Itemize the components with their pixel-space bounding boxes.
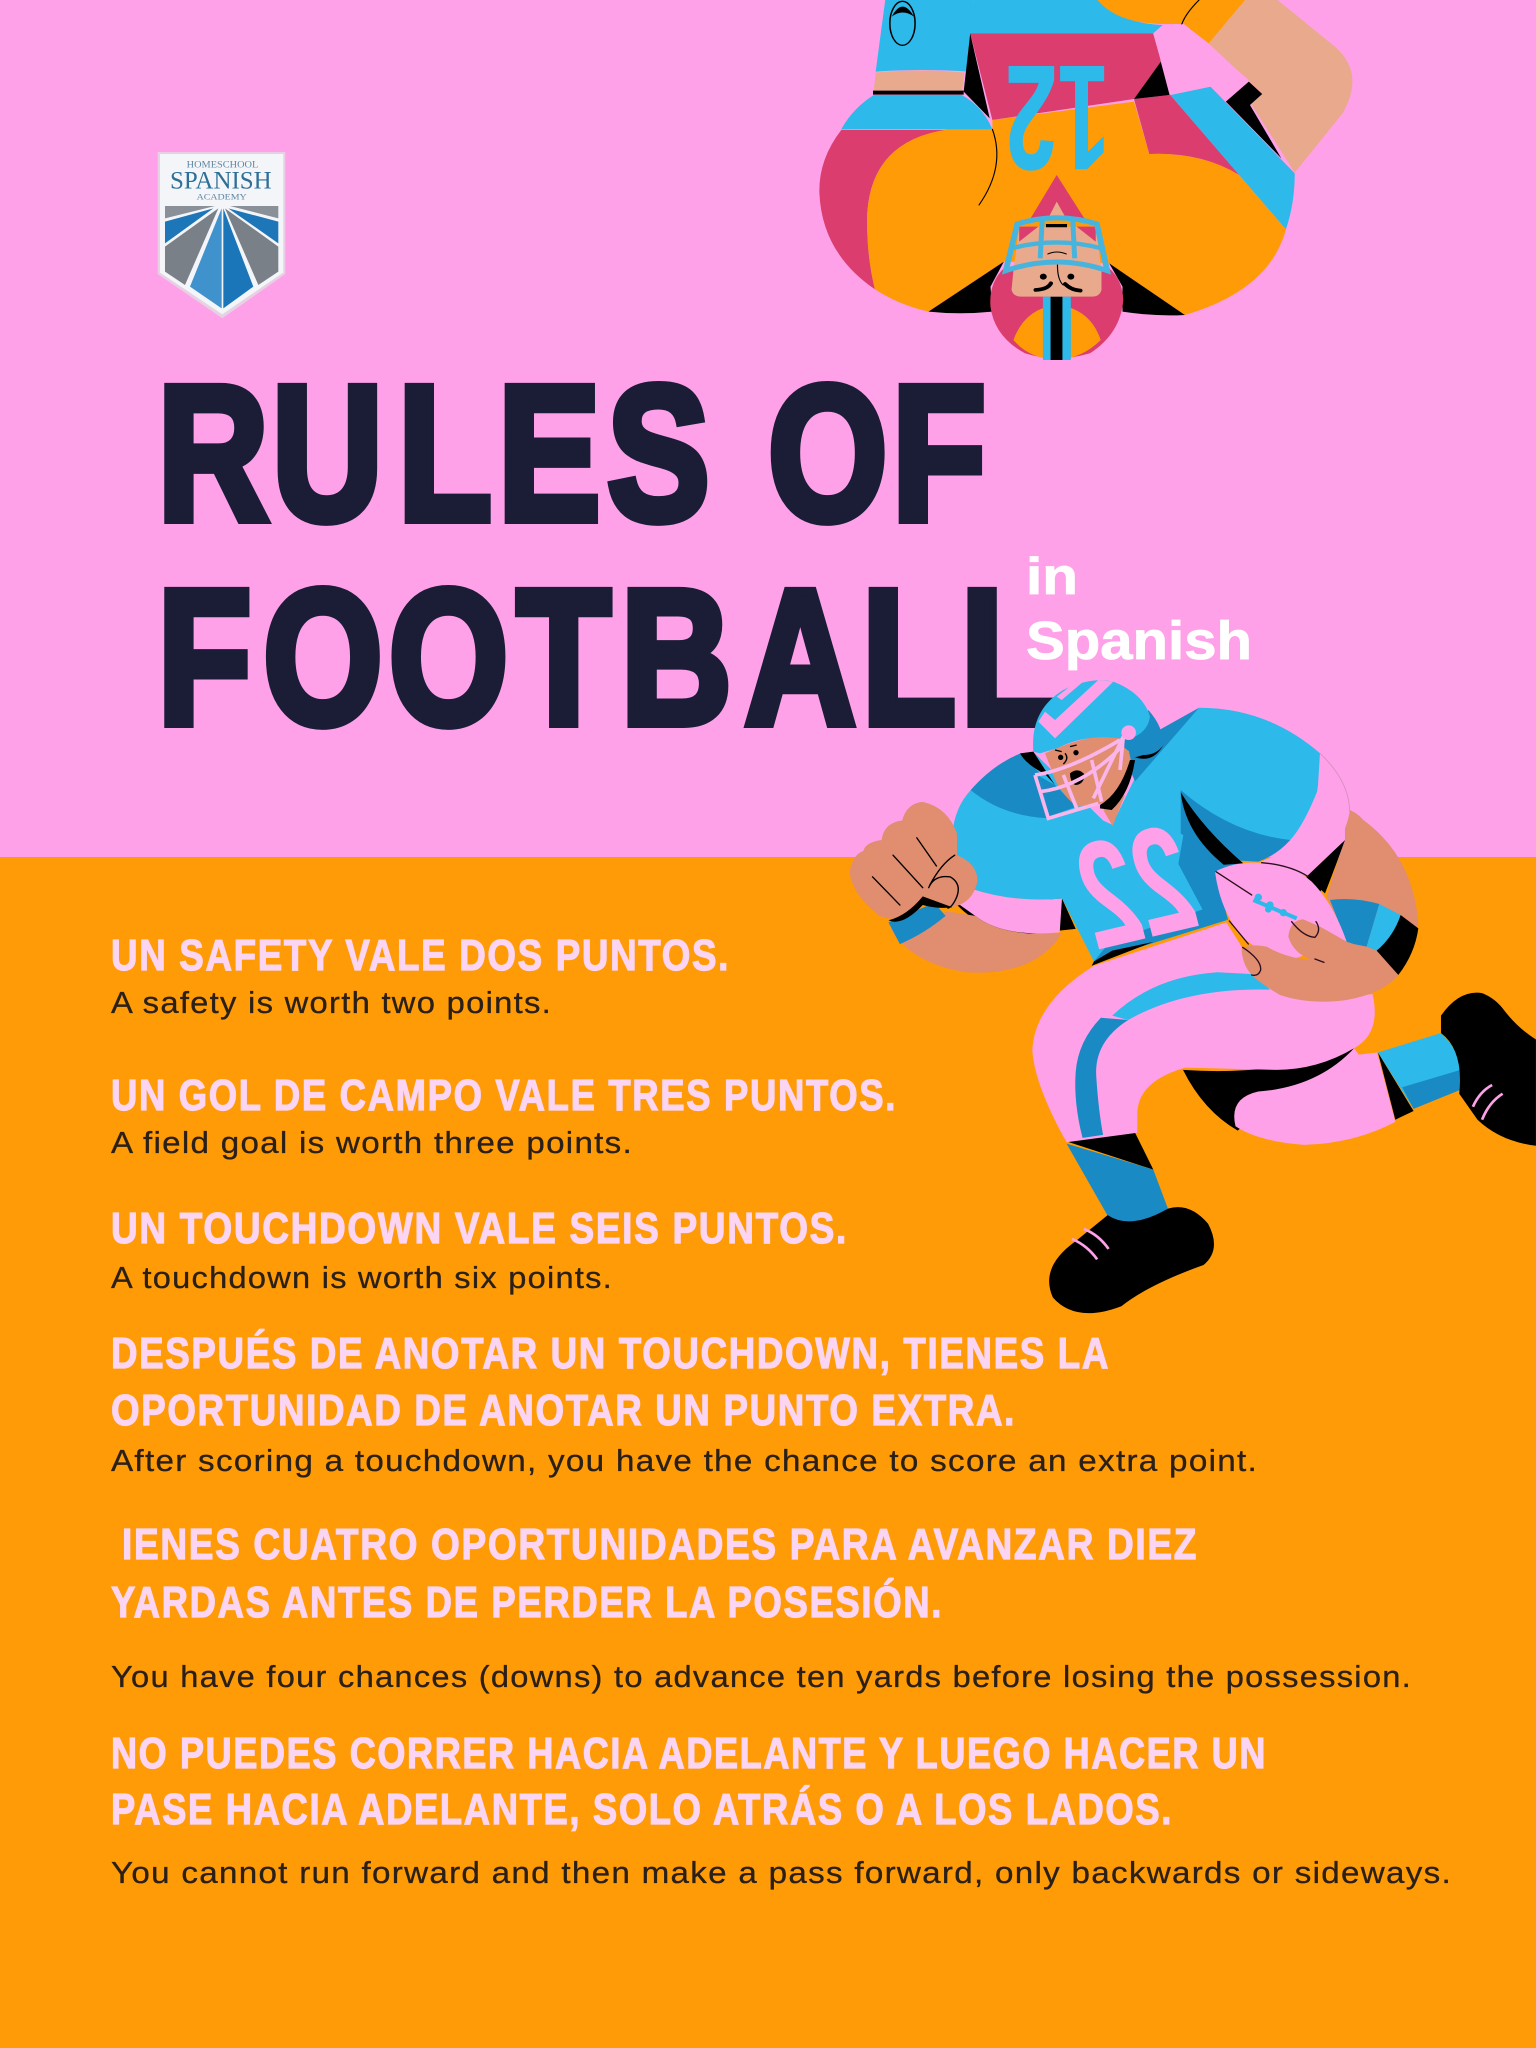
right arm: [1098, 0, 1352, 173]
rule 3: touchdown: UN TOUCHDOWN VALE SEIS PUNTOS.: [111, 1204, 848, 1253]
rule 2: field goal: UN GOL DE CAMPO VALE TRES PUNTOS.: [111, 1071, 897, 1120]
body: [850, 708, 1536, 1313]
torso: [819, 0, 1295, 315]
illustration: upside-down player number 12: [819, 0, 1352, 360]
subtitle: in Spanish: in: [1026, 548, 1078, 606]
jersey number 22 mirrored: 22: [1061, 793, 1211, 982]
rule 6: forward pass: NO PUEDES CORRER HACIA ADELANTE Y LUEGO HACER UN: [111, 1729, 1267, 1778]
logo: Homeschool Spanish Academy shield: ACADEMY: [197, 192, 247, 201]
jersey number 12: 12: [1005, 34, 1110, 202]
rule 3: touchdown: [111, 1204, 848, 1295]
rule 4: extra point: OPORTUNIDAD DE ANOTAR UN PUNTO EXTRA.: [111, 1386, 1016, 1435]
rule 2: field goal: [111, 1071, 897, 1160]
rule 5: downs: YARDAS ANTES DE PERDER LA POSESIÓN.: [111, 1577, 943, 1627]
rule 4: extra point: After scoring a touchdown, you have the chance to score an extra point.: [111, 1443, 1258, 1478]
rule 5: downs: You have four chances (downs) to advance ten yards before losing the possession.: [111, 1659, 1412, 1694]
rule 6: forward pass: You cannot run forward and then make a pass forward, only backwards or sideways.: [111, 1855, 1452, 1890]
rule 6: forward pass: [111, 1729, 1452, 1890]
back leg and shoe: [1183, 993, 1536, 1146]
title: [158, 346, 1055, 764]
rule 4: extra point: DESPUÉS DE ANOTAR UN TOUCHDOWN, TIENES LA: [111, 1328, 1110, 1378]
jersey: [952, 708, 1350, 966]
rule 5: downs: [111, 1520, 1412, 1694]
far arm: [1327, 808, 1418, 975]
front leg and shoe: [1049, 1133, 1214, 1313]
fist: [850, 802, 978, 922]
logo: Homeschool Spanish Academy shield: SPANISH: [170, 166, 272, 194]
left arm: [841, 0, 992, 129]
rule 6: forward pass: PASE HACIA ADELANTE, SOLO ATRÁS O A LOS LADOS.: [111, 1784, 1173, 1834]
helmet and face: [1020, 680, 1163, 826]
illustration: running player number 22: [850, 680, 1536, 1313]
subtitle: in Spanish: Spanish: [1026, 611, 1252, 671]
helmet and face: [928, 175, 1185, 360]
logo: Homeschool Spanish Academy shield: [159, 153, 284, 317]
title: FOOTBALL: [158, 550, 1055, 764]
logo: Homeschool Spanish Academy shield: HOMESCHOOL: [187, 160, 259, 170]
rule 1: safety: [111, 931, 730, 1020]
rule 2: field goal: A field goal is worth three points.: [111, 1125, 633, 1160]
near arm: [888, 888, 1076, 973]
rule 1: safety: A safety is worth two points.: [111, 985, 552, 1020]
rule 3: touchdown: A touchdown is worth six points.: [111, 1260, 613, 1295]
rule 5: downs: IENES CUATRO OPORTUNIDADES PARA AVANZAR DIEZ: [122, 1520, 1198, 1569]
football and hand: [1215, 840, 1398, 1002]
subtitle: in Spanish: [1026, 548, 1252, 671]
pants: [1032, 922, 1375, 1142]
title: RULES OF: [158, 346, 986, 560]
rule 1: safety: UN SAFETY VALE DOS PUNTOS.: [111, 931, 730, 980]
rule 4: extra point: [111, 1328, 1258, 1478]
